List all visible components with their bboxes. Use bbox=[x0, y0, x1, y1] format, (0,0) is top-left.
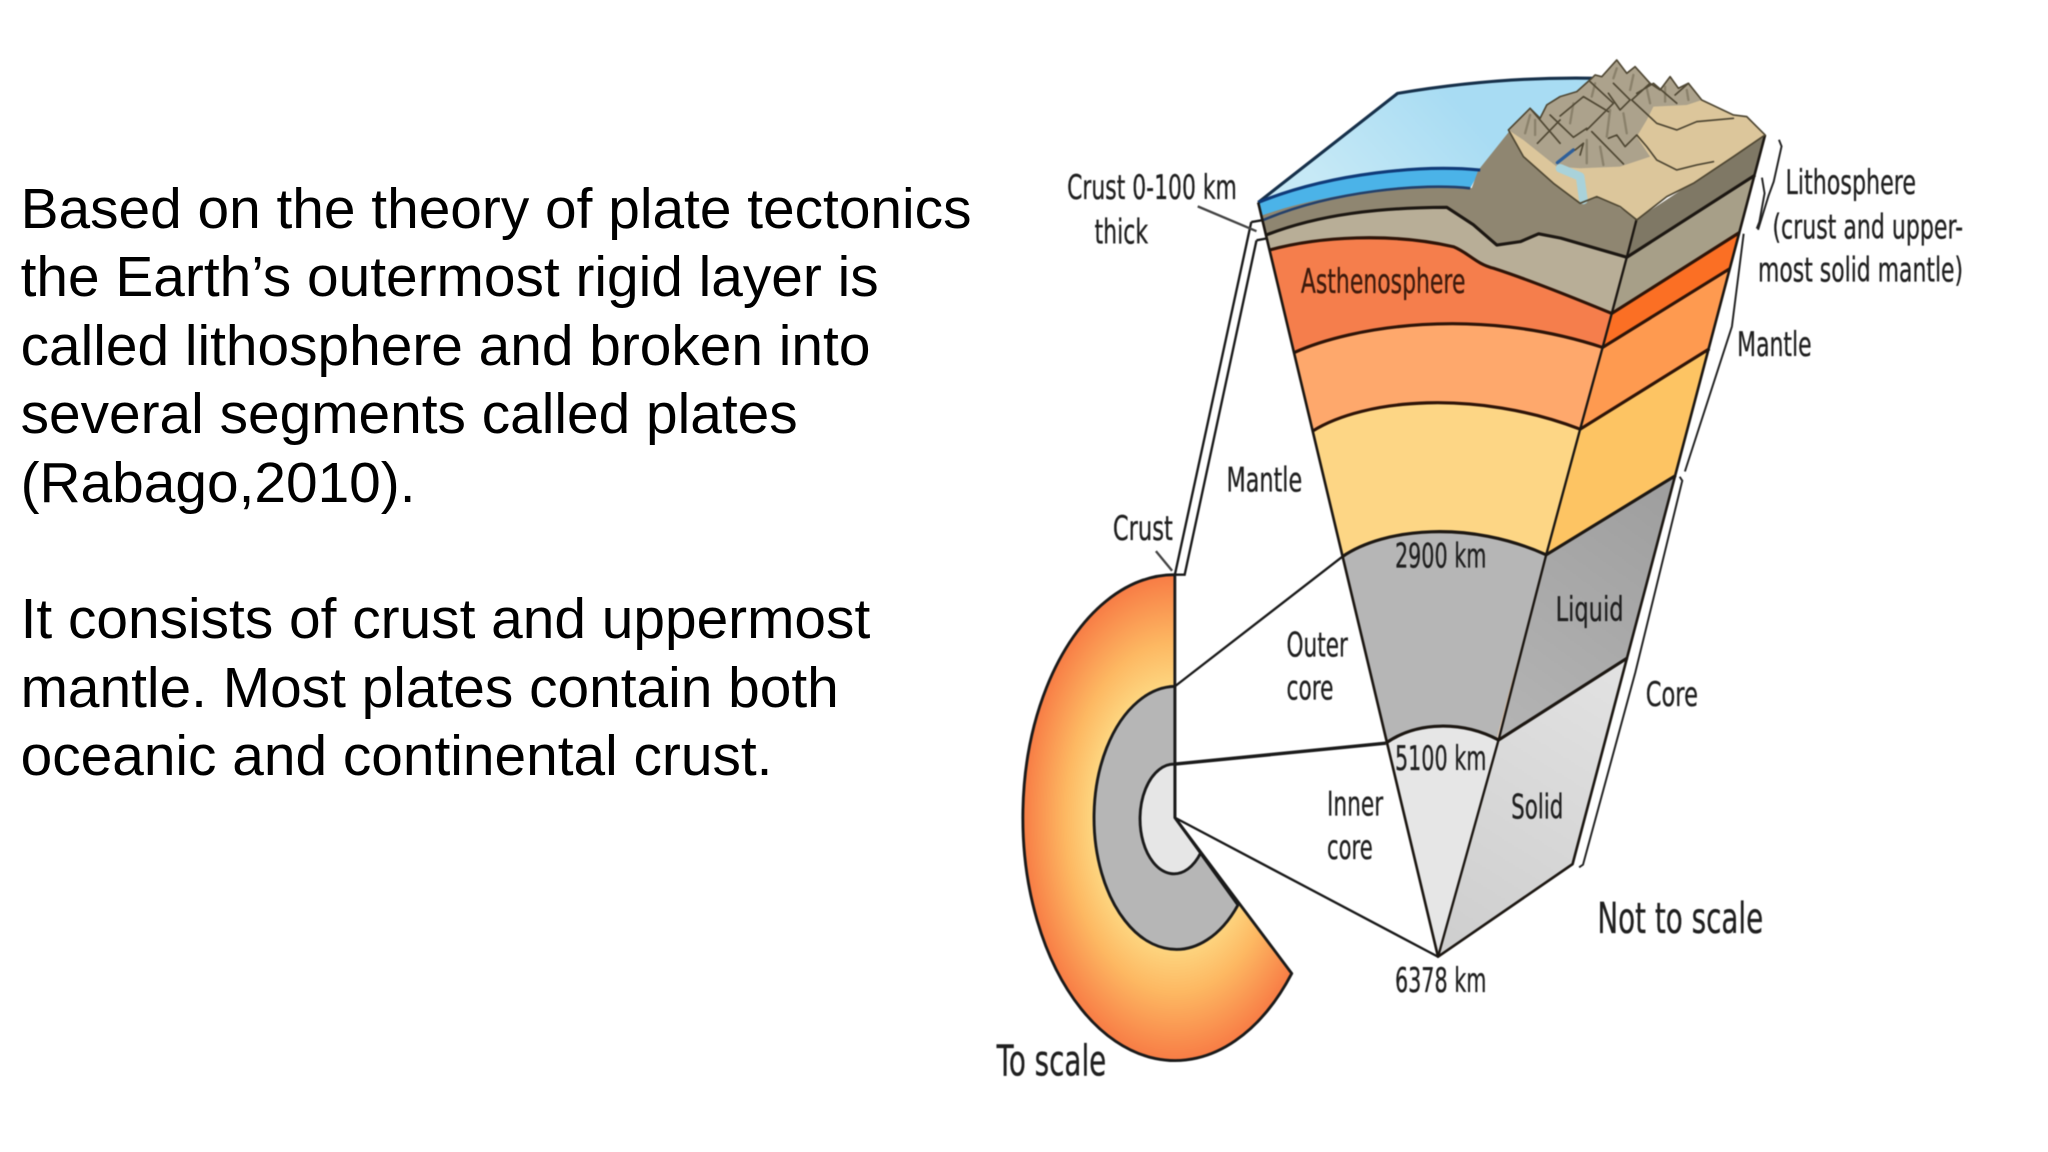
asthenosphere, front bbox=[1270, 238, 1612, 957]
label: outer core: core bbox=[1287, 668, 1334, 708]
core bracket bbox=[1579, 477, 1682, 867]
label: crust thickness: Crust 0-100 km bbox=[1067, 168, 1237, 208]
label: outer core bbox=[1287, 625, 1348, 708]
label: mantle, right: Mantle bbox=[1737, 325, 1812, 365]
label: core: Core bbox=[1646, 675, 1698, 715]
lower lithosphere, right bbox=[1612, 175, 1755, 313]
river bbox=[1560, 168, 1583, 200]
label: inner core: core bbox=[1327, 828, 1373, 868]
labels bbox=[996, 163, 1963, 1087]
label: 6378 km: 6378 km bbox=[1395, 961, 1486, 1001]
text block: plate tectonics explanation: Based on the theory of plate tectonics the Earth’s outermost rigid layer is called lithosphere and broken into several segments called plates (Rabago,2010). It consists of crust and uppermost mantle. Most plates contain both oceanic and continental crust. bbox=[21, 178, 972, 788]
label: liquid: Liquid bbox=[1556, 590, 1624, 630]
inner core, front bbox=[1386, 726, 1499, 957]
mid mantle, front bbox=[1294, 324, 1603, 957]
label: lithosphere: Lithosphere bbox=[1785, 163, 1916, 203]
wedge outlines and layer boundaries bbox=[1258, 78, 1765, 957]
label: solid: Solid bbox=[1511, 787, 1563, 827]
leader lines bbox=[1156, 206, 1256, 571]
ocean water band bbox=[1258, 168, 1480, 220]
asthenosphere, right bbox=[1603, 232, 1739, 347]
label: 2900 km: 2900 km bbox=[1395, 537, 1486, 577]
label: crust thickness: thick bbox=[1095, 213, 1148, 253]
label: 5100 km: 5100 km bbox=[1395, 739, 1486, 779]
outer core, front bbox=[1342, 532, 1546, 957]
ocean surface bbox=[1258, 78, 1620, 202]
outer core fan bbox=[1094, 686, 1238, 949]
wedge block: right face layers bbox=[1438, 135, 1765, 957]
label: mantle, left: Mantle bbox=[1226, 461, 1302, 501]
land surface bbox=[1508, 60, 1765, 220]
label: crust: Crust bbox=[1113, 509, 1173, 549]
ridge shading streaks bbox=[1525, 68, 1688, 165]
label: asthenosphere: Asthenosphere bbox=[1301, 262, 1465, 302]
label: lithosphere bbox=[1758, 163, 1963, 290]
mountain shading bbox=[1508, 60, 1702, 168]
label: inner core: Inner bbox=[1327, 785, 1383, 825]
lithosphere bracket bbox=[1758, 140, 1782, 230]
lower mantle, front bbox=[1313, 403, 1580, 957]
inner core fan bbox=[1140, 764, 1201, 874]
inner core, right bbox=[1438, 658, 1627, 957]
label: inner core bbox=[1327, 785, 1383, 868]
mantle bracket bbox=[1685, 234, 1744, 472]
crust bracket bbox=[1757, 178, 1765, 229]
ridgelines bbox=[1508, 60, 1765, 220]
mid mantle, right bbox=[1580, 269, 1730, 429]
upper crust, right bbox=[1627, 135, 1765, 257]
outer core, right bbox=[1499, 475, 1676, 740]
to-scale cutaway: fan of Earth layers bbox=[1023, 575, 1292, 1061]
label: outer core: Outer bbox=[1287, 625, 1348, 665]
label: to scale: To scale bbox=[996, 1037, 1106, 1087]
lower mantle, right bbox=[1546, 349, 1709, 555]
mantle fan bbox=[1023, 575, 1292, 1061]
wedge block: front face layers bbox=[1258, 78, 1637, 957]
label: crust thickness bbox=[1067, 168, 1237, 253]
lower lithosphere, front bbox=[1266, 207, 1627, 957]
connector lines between fan and wedge bbox=[1175, 220, 1438, 957]
upper crust, front bbox=[1262, 131, 1637, 957]
stream bbox=[1557, 150, 1573, 163]
label: not to scale: Not to scale bbox=[1597, 894, 1763, 944]
right-side brackets bbox=[1579, 140, 1782, 867]
mountains on continental surface bbox=[1508, 60, 1765, 220]
